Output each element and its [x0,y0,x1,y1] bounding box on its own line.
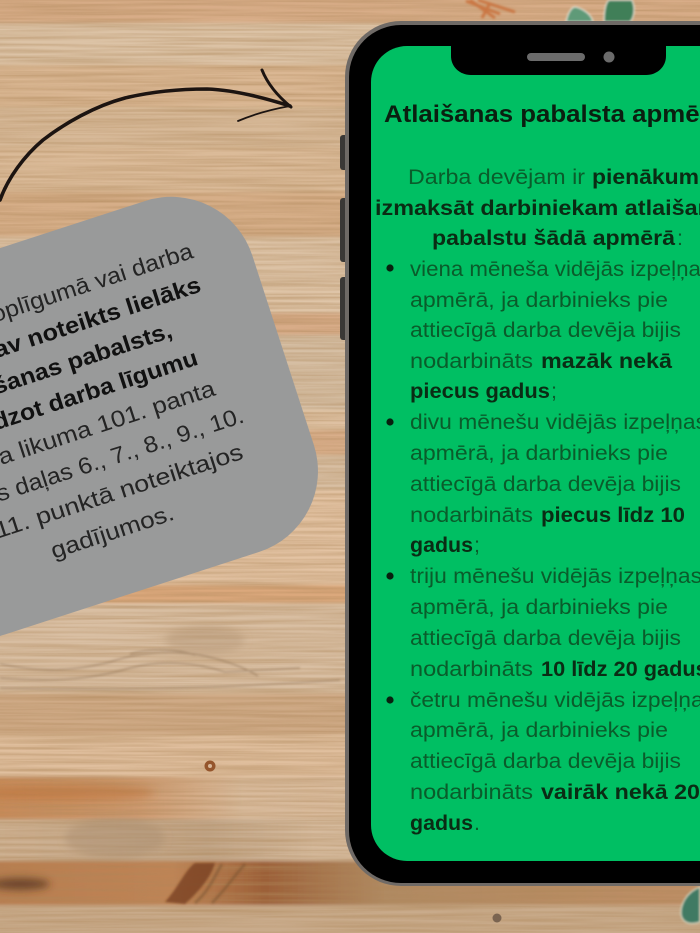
bullet: four months: . [474,811,480,835]
bullet: two months: divu mēnešu vidējās izpeļņas [410,410,700,434]
phone side buttons [340,135,350,340]
bullet: four months: četru mēnešu vidējās izpeļņas [410,688,700,712]
bullet: one month: nodarbināts [410,349,533,373]
bullet: one month: piecus gadus [410,379,550,403]
bullet: one month: mazāk nekā [541,349,673,373]
intro text: izmaksāt darbiniekam atlaišanas [375,196,700,220]
phone body [345,21,700,886]
phone speaker [527,53,585,61]
bullet: two months: piecus līdz 10 [541,503,685,527]
heading: Atlaišanas pabalsta apmērs [384,101,700,128]
bullet: three months: apmērā, ja darbinieks pie [410,595,668,619]
bullet: four months: apmērā, ja darbinieks pie [410,718,668,742]
bullet: one month: attiecīgā darba devēja bijis [410,318,681,342]
bullet: one month: ; [551,379,557,403]
bullet: two months: gadus [410,533,473,557]
bullet: one month [386,257,700,403]
bullet: two months: ; [474,533,480,557]
bullet: three months: nodarbināts [410,657,533,681]
bullet: two months: nodarbināts [410,503,533,527]
intro text: : [677,226,683,250]
card text [0,237,271,594]
bullet: two months: apmērā, ja darbinieks pie [410,441,668,465]
panel: grey rotated card [0,175,340,661]
bullet: four months [386,688,700,835]
intro text: Darba devējam ir [408,165,585,189]
bullet: four months: nodarbināts [410,780,533,804]
bullet: four months: vairāk nekā 20 [541,780,700,804]
bullet: three months: attiecīgā darba devēja bijis [410,626,681,650]
intro text: pabalstu šādā apmērā [432,226,676,250]
arrow [0,70,291,200]
phone [340,21,700,886]
bullet: two months: attiecīgā darba devēja bijis [410,472,681,496]
icon: green plant leaves behind phone [566,0,700,924]
phone camera [604,52,614,62]
icon: knots in the wood [204,760,502,922]
bullet: one month: apmērā, ja darbinieks pie [410,288,668,312]
bullet: three months [386,564,700,681]
bullet: four months: gadus [410,811,473,835]
phone notch [451,44,666,75]
bullet: two months [386,410,700,557]
bullet: four months: attiecīgā darba devēja bijis [410,749,681,773]
bullet: one month: viena mēneša vidējās izpeļņas [410,257,700,281]
intro text [375,165,700,250]
bullet: three months: triju mēnešu vidējās izpeļņas [410,564,700,588]
icon: dried plant at top [466,0,515,18]
card text: gadījumos. [47,499,177,563]
phone screen [371,46,700,861]
